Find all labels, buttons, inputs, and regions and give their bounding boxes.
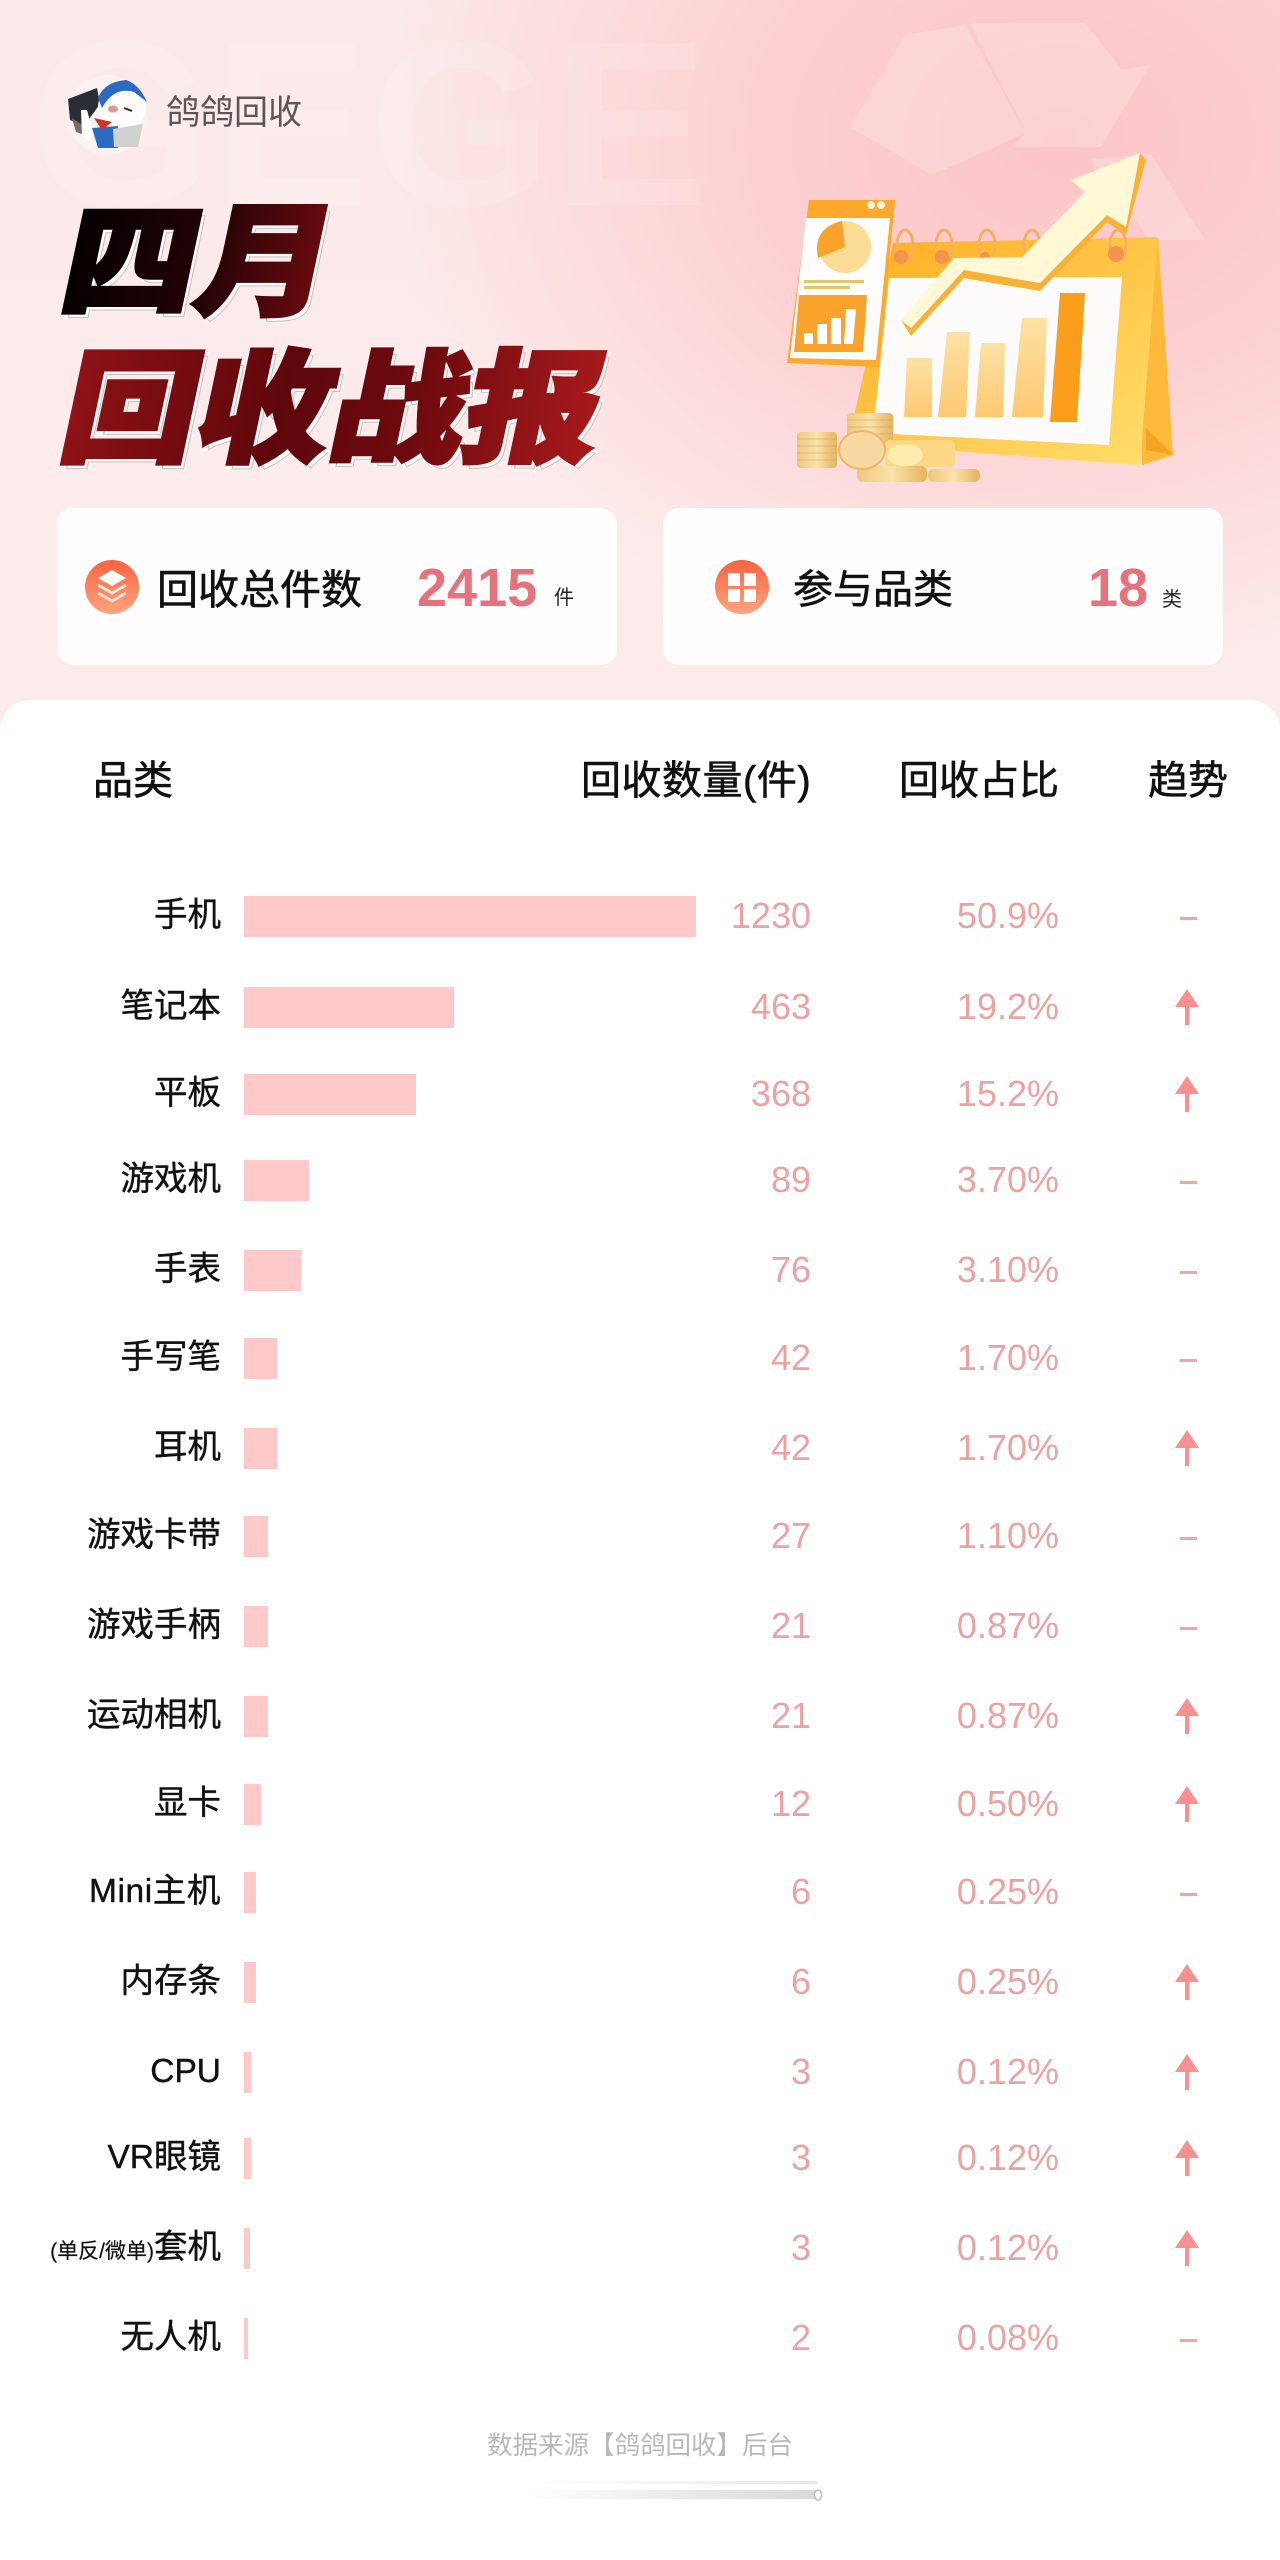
card unit: 类 xyxy=(1162,589,1182,611)
card label: 参与品类 xyxy=(793,568,953,612)
row: 显卡: 12 xyxy=(771,1783,811,1824)
phone xyxy=(787,200,895,367)
row: CPU xyxy=(150,2051,1199,2093)
row: 手表: 76 xyxy=(771,1249,811,1290)
row: 手表 xyxy=(154,1249,1197,1291)
data source note: 数据来源【鸽鸽回收】后台 xyxy=(487,2432,793,2460)
row: 游戏卡带 xyxy=(87,1515,1197,1557)
logo: mascot avatar xyxy=(68,75,147,155)
row: 运动相机 xyxy=(87,1695,1199,1737)
row: Mini主机 xyxy=(89,1871,1197,1913)
row: 游戏机 xyxy=(120,1159,1197,1201)
row: CPU: CPU xyxy=(150,2053,221,2090)
row: VR眼镜: 0.12% xyxy=(957,2137,1059,2178)
row: 运动相机: 运动相机 xyxy=(87,1697,221,1734)
row: Mini主机: 6 xyxy=(791,1871,811,1912)
stat card: categories xyxy=(663,508,1223,665)
table header: category: 品类 xyxy=(93,759,173,803)
row: 游戏卡带: 1.10% xyxy=(957,1515,1059,1556)
row: 套机: (单反/微单)套机 xyxy=(50,2229,221,2266)
row: 内存条 xyxy=(120,1961,1199,2003)
row: CPU: 0.12% xyxy=(957,2051,1059,2092)
row: 运动相机: 0.87% xyxy=(957,1695,1059,1736)
title: 四月 回收战报: 回收战报 xyxy=(51,315,625,490)
table header: share: 回收占比 xyxy=(899,759,1059,803)
row: 无人机: 2 xyxy=(791,2317,811,2358)
row: 手表: 3.10% xyxy=(957,1249,1059,1290)
row: Mini主机: Mini主机 xyxy=(89,1873,221,1910)
rising arrow xyxy=(901,153,1146,336)
row: 游戏卡带: 27 xyxy=(771,1515,811,1556)
row: VR眼镜: VR眼镜 xyxy=(107,2139,221,2176)
logo text: 鸽鸽回收 xyxy=(166,94,302,132)
stat card: total recycled xyxy=(57,508,617,665)
title: 四月 回收战报: 四月 xyxy=(51,170,357,344)
row: 内存条: 内存条 xyxy=(120,1963,221,2000)
card value: 2415 xyxy=(417,558,537,618)
card unit: 件 xyxy=(554,587,574,609)
row: 游戏机: 89 xyxy=(771,1159,811,1200)
title: 四月 回收战报: 回收战报 xyxy=(53,317,627,490)
row: 笔记本: 笔记本 xyxy=(120,988,221,1025)
row: 游戏手柄: 游戏手柄 xyxy=(87,1607,221,1644)
row: 手机: 手机 xyxy=(154,897,221,934)
row: 手表: 手表 xyxy=(154,1251,221,1288)
row: 手写笔 xyxy=(120,1337,1197,1379)
row: 显卡 xyxy=(154,1783,1199,1825)
row: 套机 xyxy=(50,2227,1199,2269)
row: 运动相机: 21 xyxy=(771,1695,811,1736)
row: 手写笔: 42 xyxy=(771,1337,811,1378)
row: 平板: 368 xyxy=(751,1073,811,1114)
faint smudge xyxy=(583,2481,822,2501)
icon: grid xyxy=(715,560,769,614)
row: 套机: 0.12% xyxy=(957,2227,1059,2268)
row: 套机: 3 xyxy=(791,2227,811,2268)
card label: 回收总件数 xyxy=(157,567,362,613)
table header: trend: 趋势 xyxy=(1148,759,1228,803)
row: VR眼镜: 3 xyxy=(791,2137,811,2178)
row: 游戏机: 3.70% xyxy=(957,1159,1059,1200)
row: 耳机 xyxy=(154,1427,1199,1469)
calendar bars xyxy=(904,293,1085,422)
row: 手写笔: 手写笔 xyxy=(120,1339,221,1376)
row: 手写笔: 1.70% xyxy=(957,1337,1059,1378)
header background xyxy=(0,0,1280,760)
row: 平板: 平板 xyxy=(154,1075,221,1112)
row: 笔记本 xyxy=(120,986,1199,1028)
row: 无人机: 无人机 xyxy=(120,2319,221,2356)
row: 平板: 15.2% xyxy=(957,1073,1059,1114)
row: 游戏卡带: 游戏卡带 xyxy=(87,1517,221,1554)
row: 显卡: 显卡 xyxy=(154,1785,221,1822)
row: 笔记本: 19.2% xyxy=(957,986,1059,1027)
coins xyxy=(797,413,980,482)
row: 手机 xyxy=(154,895,1197,937)
row: 内存条: 6 xyxy=(791,1961,811,2002)
row: 内存条: 0.25% xyxy=(957,1961,1059,2002)
row: 无人机: 0.08% xyxy=(957,2317,1059,2358)
row: CPU: 3 xyxy=(791,2051,811,2092)
icon: layers xyxy=(85,560,139,614)
illustration: calendar, phone, rising arrow and coins xyxy=(787,153,1173,482)
title: 四月 回收战报: 回收战报 xyxy=(48,312,623,488)
row: 无人机 xyxy=(120,2317,1197,2359)
row: 耳机: 耳机 xyxy=(154,1429,221,1466)
row: 手机: 50.9% xyxy=(957,895,1059,936)
calendar xyxy=(848,230,1173,465)
row: 耳机: 1.70% xyxy=(957,1427,1059,1468)
table header: quantity: 回收数量(件) xyxy=(581,759,811,803)
row: 耳机: 42 xyxy=(771,1427,811,1468)
row: 笔记本: 463 xyxy=(751,986,811,1027)
row: 游戏手柄: 0.87% xyxy=(957,1605,1059,1646)
row: VR眼镜 xyxy=(107,2137,1199,2179)
title: 四月 回收战报 xyxy=(48,170,627,490)
row: 显卡: 0.50% xyxy=(957,1783,1059,1824)
panel: data table xyxy=(0,700,1280,2560)
row: Mini主机: 0.25% xyxy=(957,1871,1059,1912)
watermark: brand letters and recycle symbol xyxy=(30,0,1204,255)
row: 平板 xyxy=(154,1073,1199,1115)
row: 游戏机: 游戏机 xyxy=(120,1161,221,1198)
title: 四月 回收战报: 四月 xyxy=(53,170,359,346)
card value: 18 xyxy=(1088,558,1148,618)
row: 游戏手柄 xyxy=(87,1605,1197,1647)
row: 手机: 1230 xyxy=(731,895,811,936)
row: 游戏手柄: 21 xyxy=(771,1605,811,1646)
